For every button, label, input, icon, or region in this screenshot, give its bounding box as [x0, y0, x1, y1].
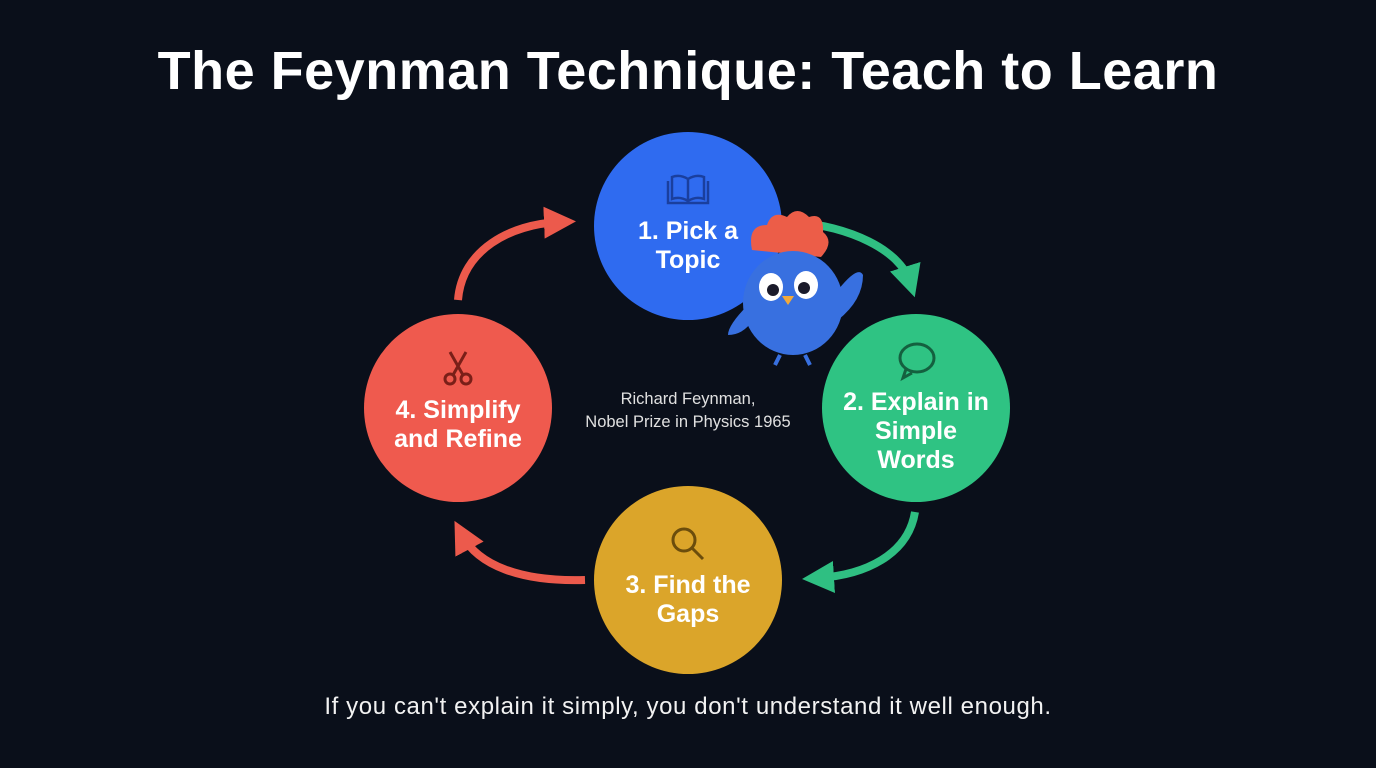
step 3: find the gaps: 3. Find the: [626, 571, 751, 599]
step 1: pick a topic: Topic: [656, 246, 720, 274]
caption: Richard Feynman: [585, 390, 791, 431]
icon: book: [668, 176, 708, 203]
arrow: 4 to 1: [458, 222, 560, 300]
step 4: simplify: 4. Simplify: [395, 396, 521, 424]
step 2: explain: Words: [877, 446, 955, 474]
step 3: find the gaps: Gaps: [657, 600, 719, 628]
step 2: explain: 2. Explain in: [843, 388, 989, 416]
step 3: find the gaps: [594, 486, 782, 674]
icon: scissors: [445, 352, 471, 384]
quote: If you can't explain it simply, you don't understand it well enough.: [324, 693, 1052, 720]
icon: speech bubble: [900, 344, 934, 378]
title: The Feynman Technique: Teach to Learn: [158, 41, 1218, 101]
step 2: explain: [822, 314, 1010, 502]
caption: Richard Feynman: Richard Feynman,: [621, 390, 755, 408]
step 1: pick a topic: [594, 132, 782, 320]
step 2: explain: Simple: [875, 417, 957, 445]
arrow: 2 to 3: [818, 512, 915, 578]
step 4: simplify: and Refine: [394, 425, 522, 453]
caption: Richard Feynman: Nobel Prize in Physics 1965: [585, 413, 791, 431]
icon: magnifier: [673, 529, 703, 559]
arrow: 1 to 2: [792, 222, 910, 282]
mascot: bird: [728, 211, 863, 365]
arrow: 3 to 4: [462, 535, 585, 580]
step 4: simplify: [364, 314, 552, 502]
step 1: pick a topic: 1. Pick a: [638, 217, 739, 245]
